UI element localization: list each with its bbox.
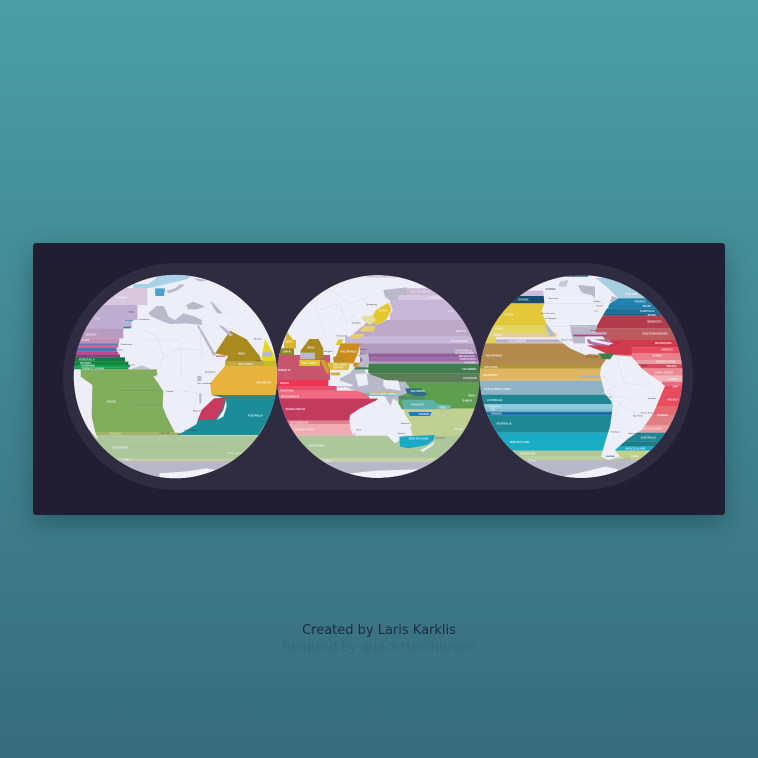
credit: remix: Remixed by @JackMerlinBruce	[283, 639, 475, 654]
label group: country labels: Shanghai	[352, 322, 361, 324]
label group: country labels: Santiago	[611, 431, 620, 434]
label group: country labels: Pyongyang	[366, 304, 378, 306]
label group: country labels: Sydney	[398, 433, 406, 435]
label group: country labels: Dakar	[117, 349, 123, 352]
label group: country labels: Vancouver	[548, 297, 559, 300]
label group: country labels: VENEZUELA	[79, 358, 95, 362]
label group: country labels: SOUTH AFRICA	[295, 427, 315, 431]
label group: country labels: MALAYSIA	[484, 365, 498, 369]
label group: country labels: MOZAMBIQUE	[281, 394, 300, 398]
label group: country labels: Auckland	[436, 437, 445, 440]
label group: country labels: ANGOLA	[667, 398, 679, 402]
label group: country labels: MEXICO	[456, 329, 466, 333]
label group: country labels: EL SALVADOR	[455, 351, 474, 355]
label group: country labels: MOROCCO	[647, 320, 662, 324]
label group: country labels: PHILIPPINES	[486, 353, 502, 357]
label group: country labels: PORTUGAL	[640, 309, 655, 313]
label group: country labels: GUYANA	[80, 361, 91, 365]
label group: country labels: CHILE	[324, 459, 333, 463]
label group: country labels: MAURITANIA	[655, 341, 672, 345]
halo behind globes	[63, 263, 693, 490]
label group: country labels: JAPAN	[378, 309, 387, 313]
label group: country labels: NEW ZEALAND	[409, 436, 428, 440]
label group: country labels: Miami	[590, 330, 596, 332]
label group: country labels: U.S. (HAWAII)	[508, 339, 526, 343]
label group: country labels: Belém	[642, 365, 648, 367]
label group: country labels: CANADA	[115, 296, 127, 300]
globe: Asia and Pacific	[277, 275, 480, 478]
dark panel	[33, 243, 725, 515]
label group: country labels: URUGUAY	[109, 432, 122, 436]
label group: country labels: MOZAMBIQUE	[290, 420, 309, 424]
label group: country labels: RUSSIA	[518, 297, 528, 301]
label group: country labels: TAIWAN	[492, 333, 503, 337]
label group: country labels: COLOMBIA	[462, 367, 477, 371]
label group: country labels: U.S.	[95, 316, 100, 320]
label group: country labels: FRANCE	[491, 412, 502, 416]
label group: country labels: Mexico City	[561, 339, 573, 342]
label group: country labels: ICELAND	[626, 292, 638, 296]
label group: country labels: CANADA	[429, 296, 440, 300]
label group: country labels: FRANCE	[418, 412, 430, 416]
label group: country labels: Perth	[356, 428, 362, 431]
label group: country labels: São Paulo	[633, 415, 644, 418]
label group: country labels: DRC	[673, 384, 679, 388]
label group: country labels: RUSSIA	[546, 287, 556, 291]
label group: country labels: Bangkok	[324, 351, 333, 353]
label group: country labels: GUATEMALA	[455, 348, 472, 352]
label group: country labels: AUSTRALIA	[487, 398, 502, 402]
label group: country labels: INDONESIA	[257, 381, 272, 385]
label group: country labels: NEW ZEALAND	[626, 447, 645, 451]
label group: country labels: CHILE	[454, 427, 463, 431]
label group: country labels: PAPUA NEW GUINEA	[484, 387, 511, 391]
label group: country labels: SPAIN	[648, 313, 656, 317]
label group: country labels: ARGENTINA	[112, 446, 128, 450]
label group: country labels: COSTA RICA	[460, 357, 476, 361]
label group: country labels: VANUATU	[411, 402, 424, 406]
label group: country labels: GUINEA	[652, 353, 662, 357]
label group: country labels: FRANCE	[635, 300, 646, 304]
label group: country labels: AUSTRALIA	[248, 413, 263, 417]
label group: country labels: NEW ZEALAND	[510, 440, 529, 444]
label group: country labels: BRUNEI	[333, 366, 344, 370]
label group: country labels: WESTERN SAHARA	[642, 332, 668, 336]
label group: country labels: SENEGAL	[661, 348, 674, 352]
label group: country labels: Boston	[597, 305, 604, 308]
label group: country labels: SOMALIA	[278, 368, 291, 372]
label group: country labels: Hong Kong	[337, 336, 348, 338]
label group: country labels: Jakarta	[337, 385, 345, 388]
globe: Africa and Indian Ocean	[74, 274, 277, 478]
label group: country labels: PAPUA NEW GUINEA	[370, 392, 397, 396]
label group: country labels: CUBA	[82, 338, 90, 342]
label group: country labels: CHILE	[528, 458, 537, 462]
label group: country labels: CHINA	[495, 327, 503, 331]
label group: country labels: KENYA	[280, 381, 289, 385]
label group: country labels: Maputo	[193, 409, 201, 412]
label group: country labels: San Francisco	[541, 312, 556, 315]
label group: country labels: INDIA	[307, 346, 315, 350]
label group: country labels: ARGENTINA	[308, 444, 324, 448]
label group: country labels: SIERRA LEONE	[656, 360, 676, 364]
label group: country labels: Nouakchott	[121, 343, 132, 346]
label group: country labels: CHILE	[631, 454, 639, 458]
label group: country labels: FIJI	[440, 405, 445, 409]
label group: country labels: SOUTH AFRICA	[642, 427, 662, 431]
label group: country labels: D.C.	[594, 311, 599, 313]
label group: country labels: Dublin	[128, 312, 135, 314]
label group: country labels: FIJI	[490, 408, 495, 412]
label group: country labels: Mogadishu	[205, 372, 216, 374]
label group: country labels: Manila	[361, 349, 368, 351]
label group: country labels: PANAMA	[464, 360, 476, 364]
label group: country labels: U.S. (HAWAII)	[451, 339, 468, 343]
label group: country labels: GHANA	[668, 377, 677, 381]
label group: country labels: NAMIBIA	[657, 413, 668, 417]
map graphic	[63, 263, 693, 490]
label group: country labels: U.S. (ALASKA)	[411, 290, 430, 294]
label group: country labels: SURINAME	[81, 364, 95, 368]
label group: country labels: SRI LANKA	[302, 361, 317, 365]
label group: country labels: Lima	[608, 396, 613, 398]
label group: country labels: JAPAN	[504, 312, 513, 316]
label group: country labels: NICARAGUA	[459, 354, 475, 358]
label group: country labels: Port	[614, 341, 619, 344]
label group: country labels: ARGENTINA	[520, 451, 536, 455]
label group: country labels: Panama City	[586, 355, 599, 358]
label group: country labels: OMAN	[283, 349, 291, 353]
label group: country labels: INDIA	[238, 352, 245, 356]
label group: country labels: MEXICO	[86, 333, 96, 337]
label group: country labels: Port Elizabeth	[184, 429, 198, 432]
label group: country labels: ECUADOR	[463, 376, 477, 380]
credit: creator: Created by Laris Karklis	[302, 623, 456, 638]
label group: country labels: FRENCH GUIANA	[82, 366, 104, 370]
label group: country labels: Cape Town	[159, 433, 171, 435]
label group: country labels: Casablanca	[138, 319, 151, 321]
label group: country labels: AUSTRALIA	[641, 436, 656, 440]
label group: country labels: U.S.	[448, 309, 453, 313]
label group: country labels: SAMOA	[462, 398, 472, 402]
label group: country labels: Rio de Janeiro	[641, 412, 655, 415]
label group: country labels: INDONESIA	[483, 373, 498, 377]
label group: country labels: PHILIPPINES	[340, 350, 357, 354]
label group: country labels: SRI LANKA	[238, 362, 253, 366]
label group: country labels: Mumbai	[254, 338, 262, 340]
label group: country labels: PERU	[468, 394, 475, 398]
label group: country labels	[79, 296, 272, 462]
label group: country labels: U.S.	[618, 456, 624, 460]
label group: country labels: SPAIN	[643, 304, 651, 308]
label group: country labels: Luanda	[166, 391, 174, 393]
label group: country labels	[483, 287, 679, 462]
label group: country labels: MALAYSIA	[333, 362, 347, 366]
label group: country labels: CHILE	[123, 458, 131, 462]
label group: country labels: YEMEN	[283, 340, 292, 344]
label group: country labels: TANZANIA	[280, 389, 293, 393]
label group: country labels: SOLOMON	[411, 389, 424, 393]
label group: country labels: BRAZIL	[107, 400, 117, 404]
label group: country labels	[278, 290, 477, 463]
label group: country labels: Brisbane	[401, 422, 410, 425]
label group: country labels: AUSTRALIA	[496, 421, 512, 425]
label group: country labels: LIBERIA	[666, 364, 677, 368]
label group: country labels: Salvador	[648, 397, 656, 400]
label group: country labels: Colombo	[255, 361, 265, 363]
label group: country labels: MADAGASCAR	[286, 407, 305, 411]
label group: country labels: VANUATU	[488, 404, 501, 408]
label group: country labels: Monrovia	[126, 363, 136, 366]
label group: country labels: Québec	[593, 301, 602, 303]
globe: Americas and Atlantic	[480, 275, 682, 478]
label group: country labels: IVORY COAST	[655, 371, 674, 375]
label group: country labels: Buenos Aires	[628, 432, 641, 435]
label group: country labels: Dar es Salaam	[197, 382, 212, 385]
label group: country labels: Los Angeles	[545, 317, 557, 320]
